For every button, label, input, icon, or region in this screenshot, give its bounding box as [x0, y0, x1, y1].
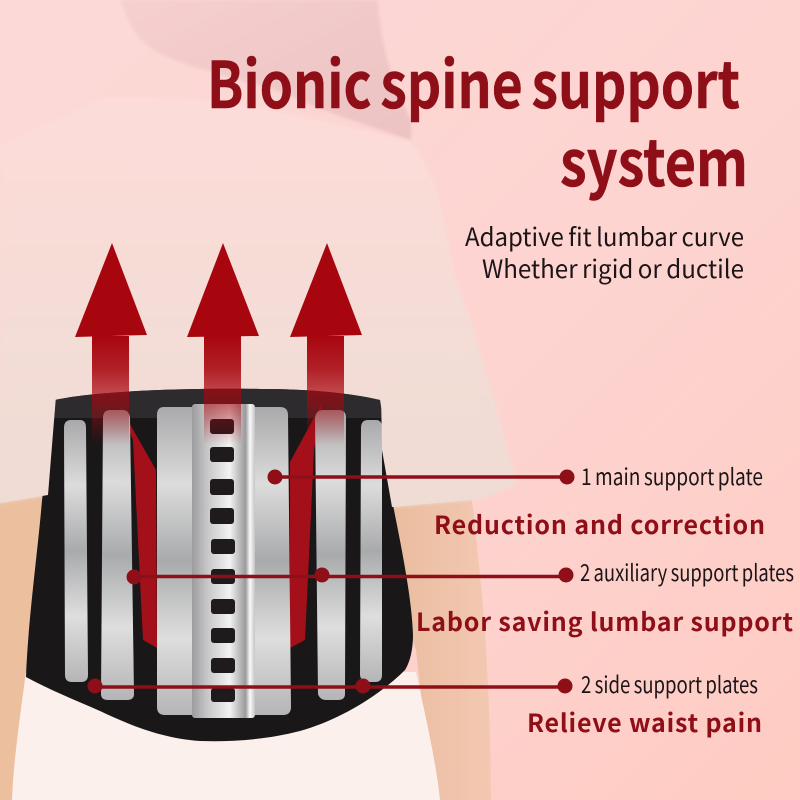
callout: auxiliary support plates: [126, 554, 794, 588]
spine holes: [210, 419, 235, 702]
belt top band: [52, 389, 383, 418]
spine channel: [192, 404, 255, 718]
arrow left: [75, 243, 147, 445]
callout: main support plate: 1 main support plate: [581, 458, 763, 492]
benefit: reduction and correction: Reduction and correction: [434, 506, 765, 542]
benefit: labor saving lumbar support: Labor saving lumbar support: [416, 603, 793, 639]
waist belt: [26, 389, 413, 741]
right sleeve: [381, 350, 517, 507]
belt body: [26, 389, 413, 741]
title: [207, 35, 748, 205]
pants: [12, 672, 440, 800]
red wing left: [118, 403, 157, 648]
callout: main support plate: [268, 458, 763, 492]
subtitle: [465, 218, 744, 286]
callout: side support plates: 2 side support plates: [581, 666, 758, 700]
auxiliary plate right: [315, 410, 346, 700]
arrow center: [187, 243, 259, 445]
callout: side support plates: [88, 666, 758, 700]
title: system: [560, 113, 748, 205]
arrow right: [290, 243, 362, 445]
left arm: [0, 495, 42, 800]
subtitle: Adaptive fit lumbar curve: [465, 218, 744, 254]
side plate left: [64, 420, 88, 682]
subtitle: Whether rigid or ductile: [482, 250, 744, 286]
hair: [121, 0, 411, 141]
right arm: [392, 500, 491, 800]
arrows: [75, 243, 362, 445]
benefit: relieve waist pain: Relieve waist pain: [527, 704, 762, 740]
side plate right: [360, 420, 382, 682]
left sleeve: [0, 396, 56, 503]
auxiliary plate left: [101, 410, 134, 700]
red wing right: [290, 403, 322, 648]
figure: [0, 0, 517, 800]
main support plate: [157, 407, 291, 715]
shirt torso: [0, 97, 517, 507]
